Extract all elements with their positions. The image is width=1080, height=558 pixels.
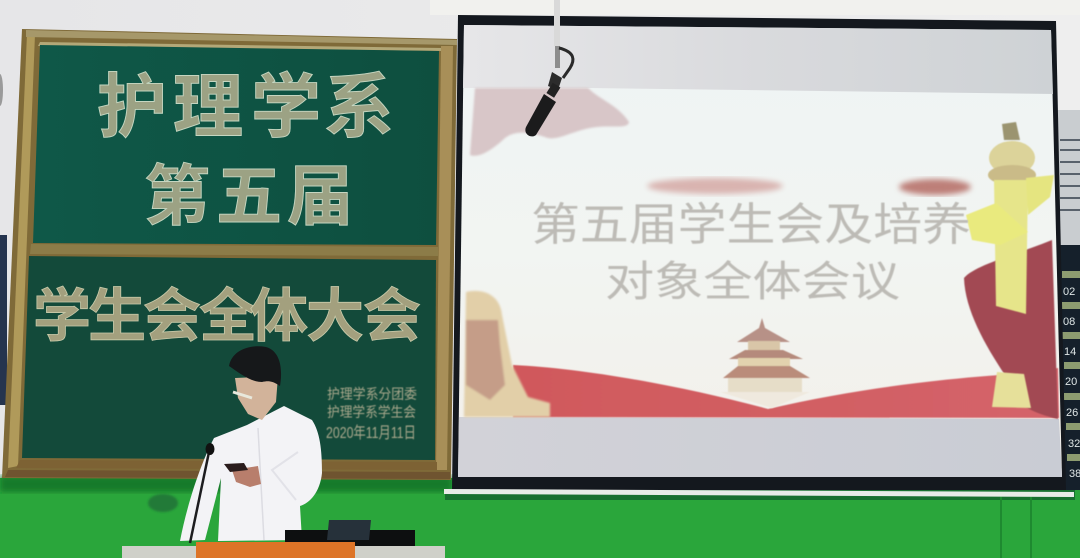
heading: line 1: 护理学系: [97, 68, 394, 146]
middle rail: [30, 244, 438, 256]
organiser signature: 护理学系学生会: [327, 404, 416, 420]
neck and face: [235, 376, 278, 420]
clouds: [647, 178, 971, 195]
red swoosh: [964, 240, 1058, 419]
red ribbon base: [513, 365, 1059, 418]
glasses: [233, 392, 252, 398]
hanging microphone: [525, 0, 573, 136]
upper board: [33, 45, 439, 245]
right calendar: 32: [1068, 438, 1080, 450]
right calendar: 26: [1066, 407, 1078, 419]
right notice board: [1056, 110, 1080, 245]
speaker: [180, 346, 322, 541]
green wainscot: [0, 476, 1080, 558]
lower board: [22, 256, 436, 460]
hair: [229, 346, 281, 386]
projection screen: [444, 15, 1074, 497]
huabiao column: [966, 122, 1054, 408]
screen surface: [458, 25, 1062, 477]
board frame: [2, 29, 457, 480]
heading: line 3: 学生会全体大会: [33, 284, 421, 349]
blackboard: [2, 29, 457, 480]
ceiling rail above screen: [430, 0, 1080, 15]
temple of heaven: [720, 318, 810, 408]
right calendar: 08: [1063, 316, 1075, 328]
right calendar: 14: [1064, 346, 1076, 358]
organiser signature: 2020年11月11日: [326, 424, 416, 442]
hand and phone: [232, 466, 261, 487]
podium microphone: [190, 443, 214, 543]
shirt: [180, 406, 322, 541]
slide title line 2: 对象全体会议: [605, 258, 900, 305]
red flag corner: [470, 88, 629, 156]
screen bottom bar: [444, 489, 1074, 497]
screen casing: [452, 15, 1066, 490]
lectern: [122, 542, 445, 558]
right calendar: 02: [1063, 286, 1075, 298]
right calendar: 20: [1065, 376, 1077, 388]
stone lion: [464, 291, 550, 417]
organiser signature: [326, 386, 417, 442]
slide title line 1: 第五届学生会及培养: [531, 199, 971, 250]
left edge calendar strip: [0, 74, 7, 405]
organiser signature: 护理学系分团委: [327, 386, 417, 402]
heading: line 2: 第五届: [144, 159, 353, 233]
laptop and phone set: [285, 520, 415, 546]
right calendar: [1058, 245, 1080, 490]
slide top band: [463, 25, 1053, 94]
slide bottom band: [458, 417, 1062, 477]
